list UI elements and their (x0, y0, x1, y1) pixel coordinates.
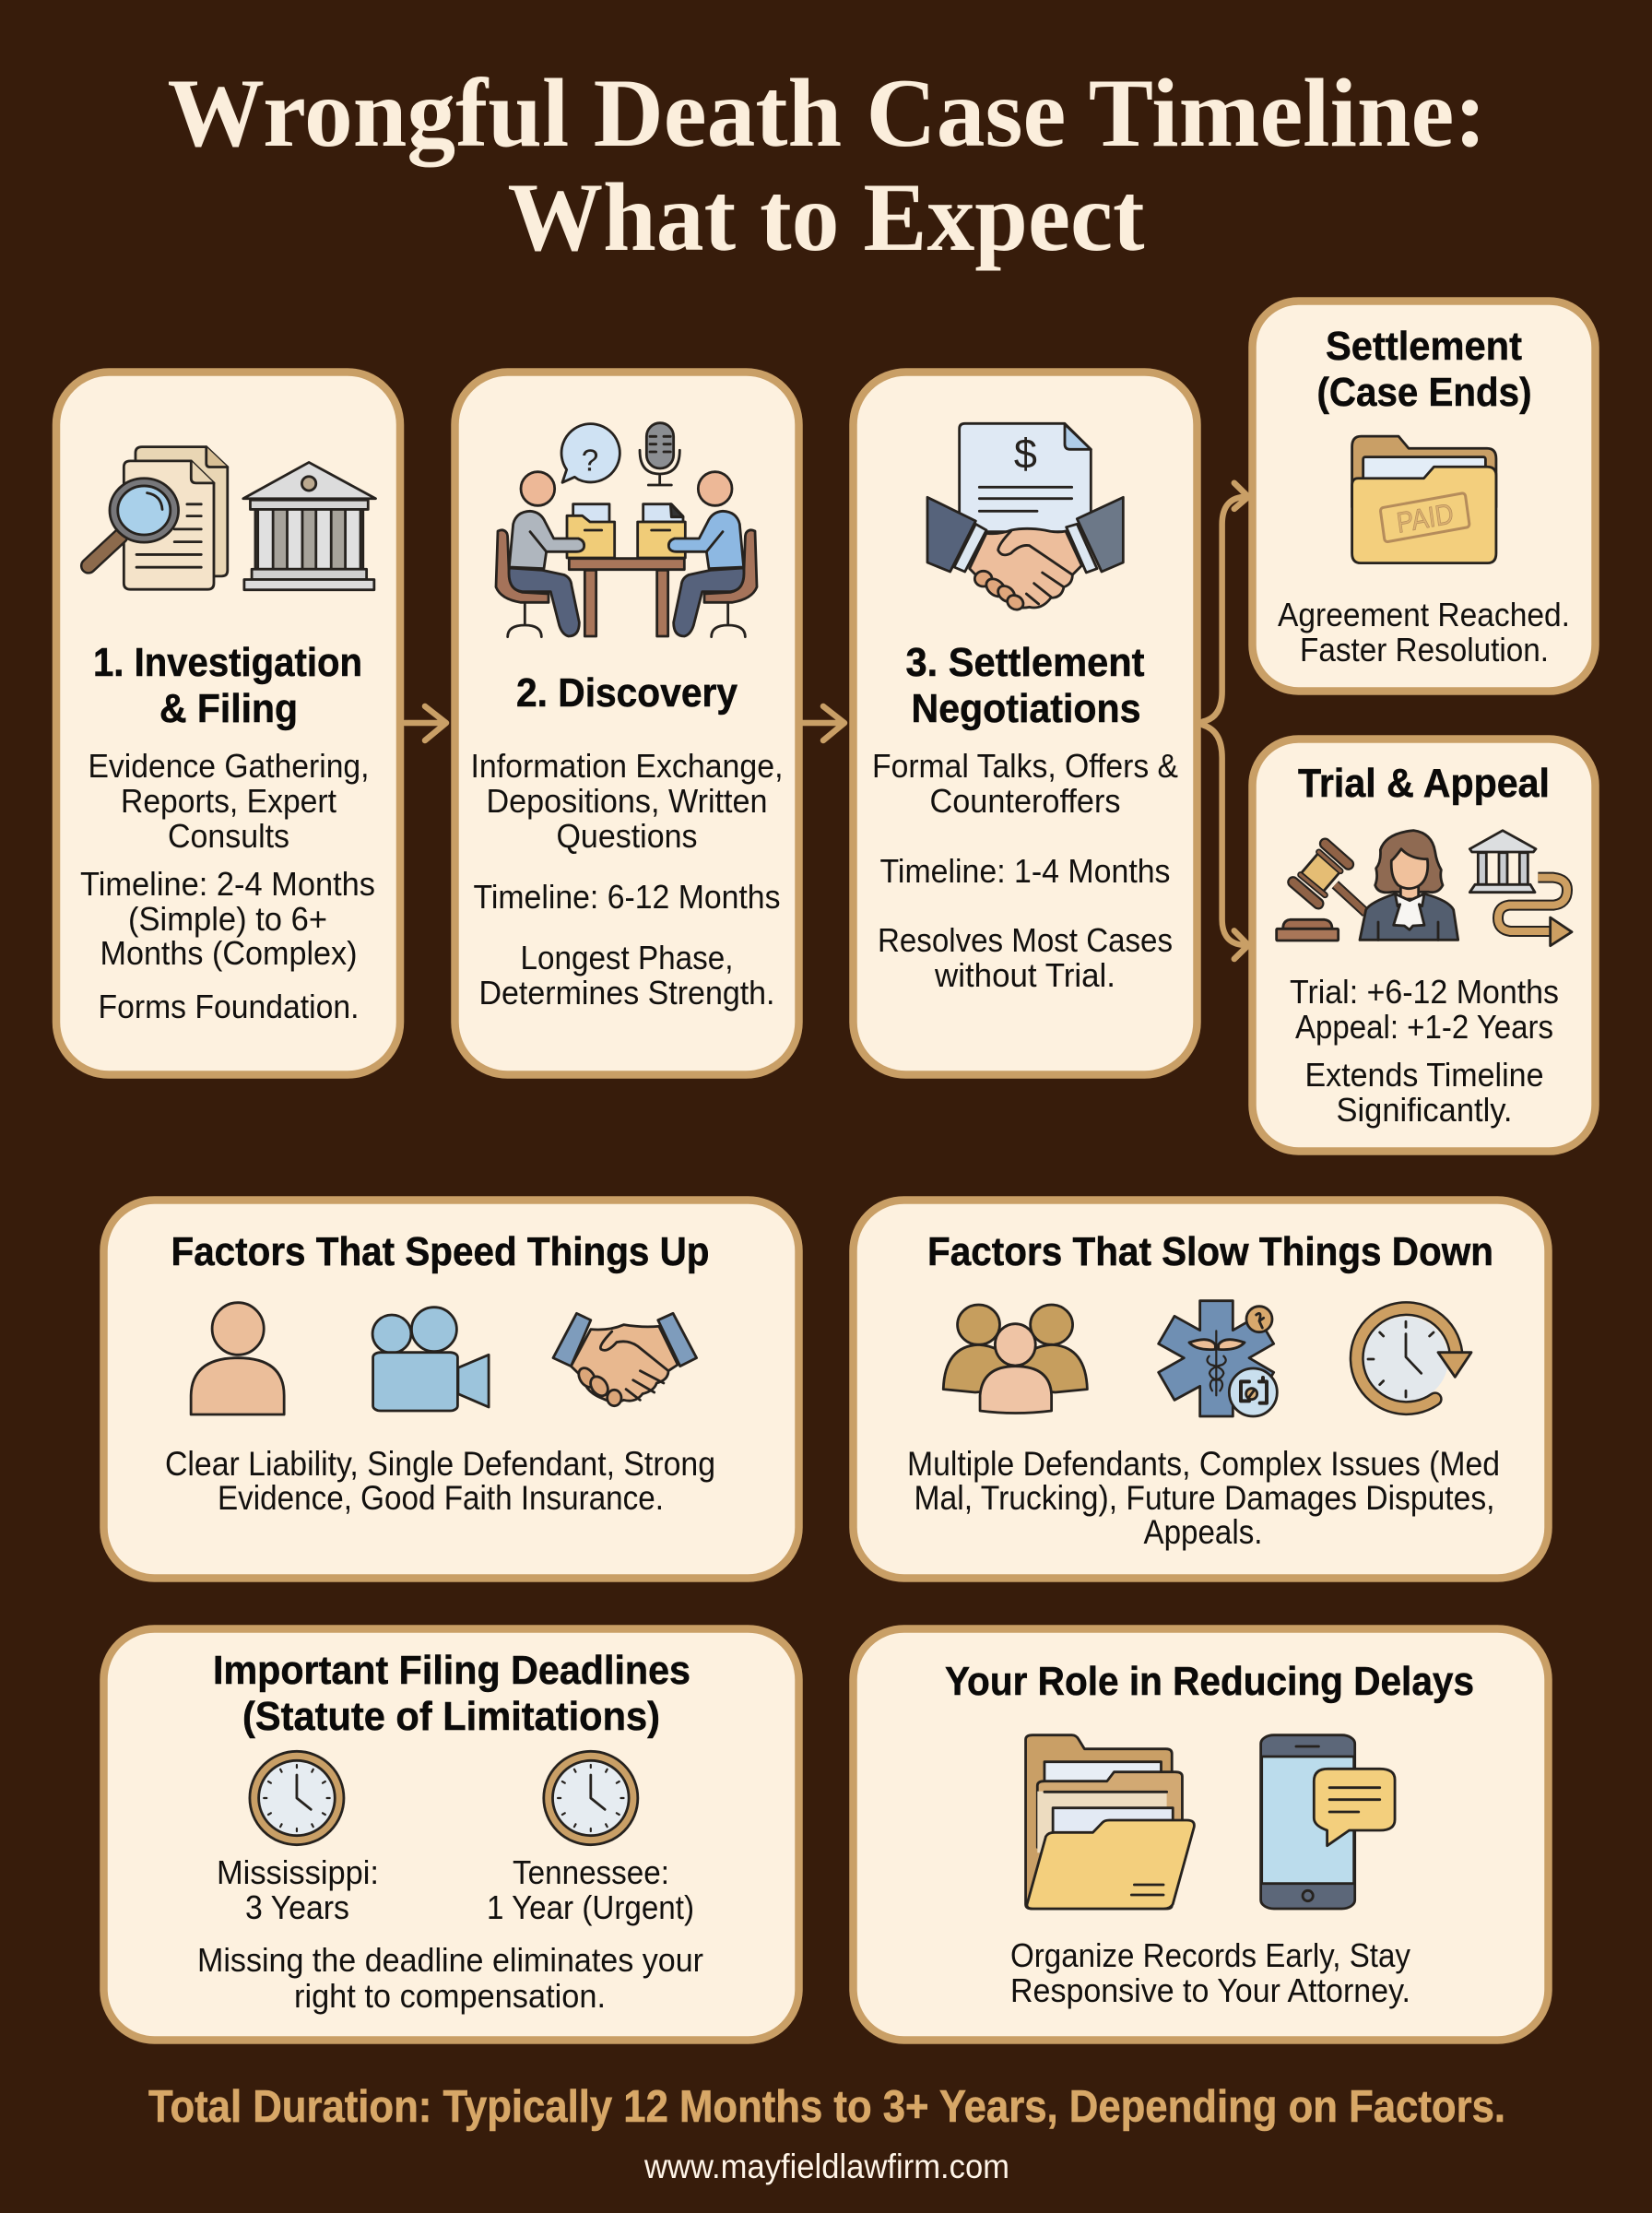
title (168, 59, 1486, 271)
text block: Multiple Defendants, Complex Issues (Med (907, 1445, 1500, 1483)
text block: Timeline: 2-4 Months (80, 865, 375, 903)
title: What to Expect (507, 163, 1145, 271)
text block: Questions (557, 817, 697, 855)
heading: & Filing (159, 686, 298, 731)
icon: single person (191, 1303, 284, 1414)
text: Mississippi deadline: Mississippi: (217, 1853, 379, 1891)
icon: two people exchanging documents with question bubble and microphone (496, 423, 757, 637)
text block (907, 1445, 1500, 1551)
text block: Responsive to Your Attorney. (1010, 1971, 1410, 2009)
icon: documents and magnifying glass (88, 447, 228, 589)
icon: multiple people (943, 1305, 1087, 1413)
text block: Determines Strength. (479, 974, 774, 1012)
website url: www.mayfieldlawfirm.com (643, 2148, 1009, 2185)
text block: Trial: +6-12 Months (1290, 973, 1559, 1011)
text block: Timeline: 1-4 Months (879, 852, 1171, 890)
text: Tennessee deadline: Tennessee: (513, 1853, 669, 1891)
text block: right to compensation. (294, 1977, 606, 2015)
arrow: branches to settlement and trial (1203, 483, 1248, 959)
icon: paid folder: PAID (1395, 498, 1456, 539)
text block: Appeal: +1-2 Years (1295, 1008, 1553, 1046)
icon: video camera (372, 1308, 489, 1411)
text block: Formal Talks, Offers & (872, 747, 1178, 785)
heading (905, 640, 1145, 731)
text block: Information Exchange, (470, 747, 784, 785)
icon: stacked folders (1026, 1735, 1194, 1909)
text block (165, 1445, 715, 1517)
text block: (Simple) to 6+ (128, 900, 327, 938)
heading (1316, 324, 1532, 415)
text block: Counteroffers (929, 782, 1121, 820)
panel: 1. Investigation & Filing (56, 373, 400, 1075)
text block (1278, 596, 1570, 669)
text block: Significantly. (1337, 1091, 1512, 1129)
text block: Clear Liability, Single Defendant, Strong (165, 1445, 715, 1483)
panel: 3. Settlement Negotiations (854, 373, 1197, 1075)
heading: Settlement (1326, 324, 1522, 369)
text block: Resolves Most Cases (878, 921, 1173, 959)
icon: courthouse (243, 462, 375, 590)
title: Wrongful Death Case Timeline: (168, 59, 1486, 167)
text block: Reports, Expert (121, 782, 336, 820)
text block: Forms Foundation. (98, 988, 360, 1025)
right person at table (638, 472, 757, 637)
text block (80, 747, 375, 1025)
text block: Longest Phase, (520, 939, 734, 976)
icon: clock Mississippi (250, 1751, 344, 1845)
icon: judge (1360, 831, 1458, 940)
text: Mississippi deadline (217, 1853, 379, 1926)
icon: contract and handshake: $ (1014, 431, 1037, 478)
text block: Depositions, Written (487, 782, 767, 820)
text block (197, 1941, 703, 2015)
heading: Negotiations (911, 686, 1141, 731)
total duration callout: Total Duration: Typically 12 Months to 3+ Years, Depending on Factors. (148, 2082, 1505, 2132)
text block: Months (Complex) (100, 934, 358, 972)
text block: Evidence Gathering, (88, 747, 369, 785)
icon: medical star of life (1159, 1301, 1277, 1416)
panel: trial and appeal outcome (1252, 740, 1595, 1151)
heading: Factors That Speed Things Up (171, 1229, 710, 1274)
icon: appeal courthouse and path arrow (1469, 831, 1572, 946)
text block: Timeline: 6-12 Months (474, 878, 780, 916)
table (569, 559, 684, 636)
heading: Trial & Appeal (1298, 761, 1550, 806)
left person at table (496, 472, 615, 637)
heading: 3. Settlement (905, 640, 1145, 685)
heading: 2. Discovery (516, 670, 738, 716)
heading (93, 640, 362, 731)
panel: factors that speed things up (103, 1201, 798, 1579)
icon: clock with delay arrow (1357, 1308, 1471, 1408)
arrow: step 1 to step 2 (405, 706, 446, 740)
text block: Agreement Reached. (1278, 596, 1570, 633)
icon: paid folder (1352, 436, 1496, 563)
text block: Missing the deadline eliminates your (197, 1941, 703, 1979)
panel: 2. Discovery (455, 373, 798, 1075)
text block (1010, 1936, 1410, 2009)
icon: phone with message bubble (1261, 1735, 1395, 1909)
heading: Factors That Slow Things Down (927, 1229, 1493, 1274)
speech bubble: ? (582, 444, 598, 479)
heading: (Statute of Limitations) (242, 1694, 660, 1739)
panel: your role in reducing delays (854, 1628, 1549, 2040)
panel: factors that slow things down (854, 1201, 1549, 1579)
text block (872, 747, 1178, 994)
icon: handshake (553, 1313, 697, 1406)
icon: contract and handshake (927, 423, 1123, 612)
text block: Mal, Trucking), Future Damages Disputes, (914, 1479, 1495, 1517)
text block: without Trial. (934, 956, 1115, 994)
text block: Organize Records Early, Stay (1010, 1936, 1410, 1974)
speech bubble (561, 424, 620, 482)
heading: Important Filing Deadlines (213, 1648, 690, 1693)
text block: Faster Resolution. (1300, 631, 1549, 669)
microphone (640, 423, 679, 485)
text: Mississippi deadline: 3 Years (245, 1888, 349, 1926)
heading: 1. Investigation (93, 640, 362, 685)
icon: gavel (1277, 844, 1366, 941)
arrow: step 2 to step 3 (803, 706, 844, 740)
text: Tennessee deadline: 1 Year (Urgent) (487, 1888, 694, 1926)
text block (470, 747, 784, 1012)
icon: clock Tennessee (544, 1751, 638, 1845)
text block: Appeals. (1143, 1513, 1263, 1551)
text: Tennessee deadline (487, 1853, 694, 1926)
heading: Your Role in Reducing Delays (945, 1659, 1474, 1704)
text block: Evidence, Good Faith Insurance. (218, 1479, 664, 1517)
heading: (Case Ends) (1316, 370, 1532, 415)
panel: important filing deadlines (103, 1628, 798, 2040)
text block (1290, 973, 1559, 1129)
heading (213, 1648, 690, 1739)
text block: Extends Timeline (1305, 1056, 1543, 1094)
panel: settlement outcome (1252, 301, 1595, 692)
text block: Consults (168, 817, 289, 855)
